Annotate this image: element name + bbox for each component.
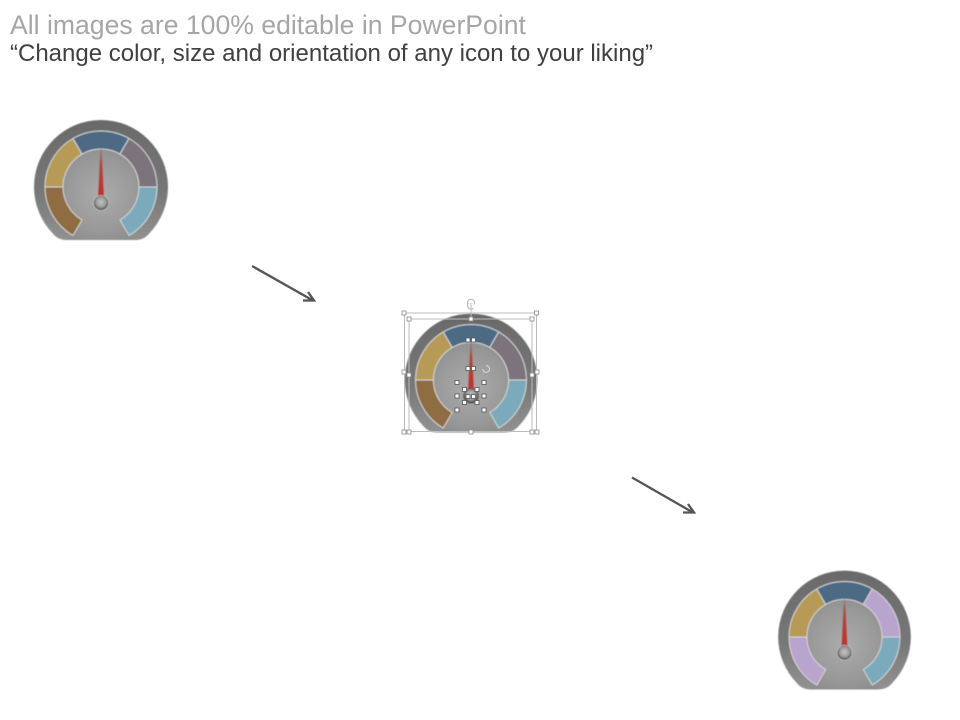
gauge: bottom right (778, 571, 911, 689)
arrow: first (252, 266, 314, 300)
dial face (433, 342, 509, 432)
needle pivot (464, 388, 478, 403)
segment: upper left (789, 589, 826, 637)
segment: lower left (45, 187, 82, 236)
gauge: center selected (405, 314, 537, 432)
needle (98, 149, 104, 199)
segment: top (817, 582, 872, 604)
segment: top (443, 325, 499, 347)
segment: upper left (45, 138, 82, 187)
title: All images are 100% editable in PowerPoint (10, 10, 526, 40)
segment: lower right (863, 637, 900, 685)
segment: upper right (120, 138, 157, 187)
subtitle: “Change color, size and orientation of any icon to your liking” (10, 40, 653, 67)
segment: lower right (490, 380, 526, 428)
selection handles (402, 299, 539, 434)
needle pivot (837, 645, 852, 660)
segment: upper right (490, 332, 526, 380)
segment: top (73, 131, 129, 154)
dial face (807, 599, 882, 689)
gauge body (405, 314, 537, 432)
segment: upper left (416, 332, 452, 380)
gauge: top left (34, 120, 168, 240)
needle (841, 599, 848, 649)
dial face (63, 149, 139, 240)
needle (468, 342, 474, 392)
segment: lower left (416, 380, 452, 428)
needle pivot (94, 196, 108, 210)
arrow: second (632, 478, 694, 512)
gauge body (778, 571, 911, 689)
gauge body (34, 120, 168, 240)
segment: lower right (120, 187, 157, 236)
segment: lower left (789, 637, 826, 685)
segment: upper right (863, 589, 900, 637)
